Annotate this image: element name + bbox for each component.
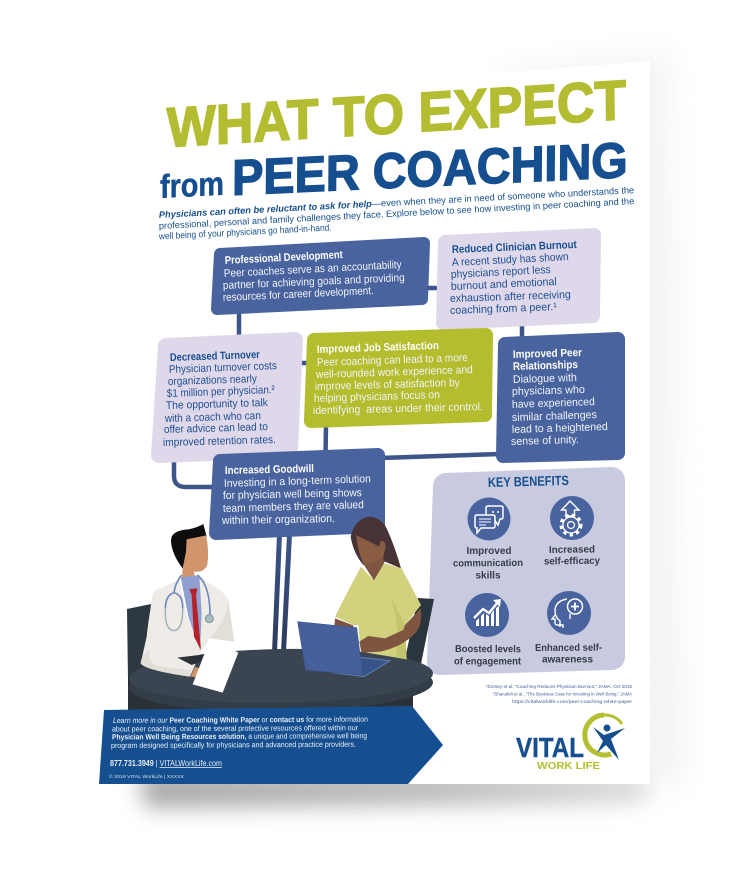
label: increased self-efficacy: [544, 544, 600, 567]
right chair: [405, 598, 434, 664]
connector posts behind table: [272, 535, 292, 652]
body text: organizations nearly: [168, 373, 257, 388]
logo tagline: WORK LIFE: [537, 760, 600, 772]
paper sheet: [99, 61, 650, 784]
body text: improved retention rates.: [163, 434, 276, 449]
face: [356, 535, 385, 565]
panel: improved job satisfaction: [311, 335, 486, 421]
heading: improved job satisfaction: Improved Job Satisfaction: [317, 340, 439, 356]
body text: coaching from a peer.¹: [450, 301, 557, 317]
shirt: [181, 575, 202, 650]
heading: key benefits: KEY BENEFITS: [488, 473, 569, 490]
body text: resources for career development.: [223, 285, 374, 304]
body text: exhaustion after receiving: [450, 289, 571, 305]
label: improved communication skills: skills: [475, 570, 501, 582]
body text: [221, 473, 371, 527]
label: boosted levels of engagement: of engagement: [454, 656, 522, 668]
body text: physicians report less: [451, 264, 551, 281]
panel: increased goodwill: [216, 455, 378, 533]
references: [486, 684, 633, 704]
heading: decreased turnover: Decreased Turnover: [170, 349, 261, 364]
icon: self-awareness head: [547, 591, 591, 635]
references: ¹Dorsey et al. "Coaching Reduces Physician Burnout," JAMA, Oct 2019: [486, 684, 632, 689]
laptop: [298, 622, 390, 677]
logo wordmark: VITAL: [516, 732, 584, 763]
icon: communication bubbles: [468, 498, 510, 540]
body text: Physician turnover costs: [169, 360, 277, 376]
hair: [171, 524, 207, 569]
intro paragraph: professional, personal and family challenges they face. Explore below to see how investing in peer coaching and the: [159, 196, 634, 231]
references: https://vitalworklife.com/peer-coaching-white-paper: [512, 699, 633, 704]
icon: engagement growth chart: [465, 593, 509, 637]
body text: partner for achieving goals and providing: [223, 272, 405, 292]
references: ²Shanafelt et al., "The Business Case for Investing in Well Being," JAMA: [493, 692, 633, 696]
paper: [193, 638, 238, 693]
panel: reduced clinician burnout: [443, 235, 594, 323]
banner text: program designed specifically for physicians and advanced practice providers.: [111, 740, 356, 750]
banner: call to action: [99, 706, 443, 784]
body text: team members they are valued: [223, 499, 364, 515]
hand: [191, 667, 214, 677]
face and neck: [182, 535, 208, 582]
scrub top: [335, 563, 421, 659]
body text: helping physicians focus on: [314, 389, 440, 405]
body text: [163, 360, 277, 449]
body text: Dialogue with: [513, 372, 577, 386]
body text: have experienced: [512, 396, 595, 411]
connector lines: [174, 288, 522, 487]
body text: similar challenges: [512, 409, 598, 424]
label: increased self-efficacy: Increased: [549, 544, 595, 556]
body text: burnout and emotional: [451, 276, 557, 293]
heading: reduced clinician burnout: Reduced Clinician Burnout: [452, 239, 577, 256]
body text: improve levels of satisfaction by: [315, 377, 460, 393]
title: PEER COACHING: [232, 132, 628, 206]
body text: offer advice can lead to: [164, 421, 268, 436]
banner text: Learn more in our Peer Coaching White Paper or contact us for more information: [113, 715, 368, 725]
banner text: about peer coaching, one of the several protective resources offered within our: [112, 723, 358, 733]
body text: physicians who: [512, 384, 585, 398]
intro paragraph: well being of your physicians go hand-in-hand.: [158, 222, 332, 242]
body text: Investing in a long-term solution: [224, 473, 371, 490]
title: WHAT TO EXPECT: [167, 68, 626, 159]
body text: sense of unity.: [511, 434, 579, 448]
label: increased self-efficacy: self-efficacy: [544, 556, 600, 567]
illustration: nurse and laptop: [298, 517, 421, 677]
table: [128, 646, 433, 715]
panel: key benefits: [440, 473, 612, 668]
panel: decreased turnover: [159, 340, 295, 455]
body text: Peer coaching can lead to a more: [317, 352, 468, 369]
heading: professional development: Professional Development: [225, 249, 343, 267]
title: [160, 68, 628, 206]
body text: The opportunity to talk: [166, 397, 269, 412]
logo: vital work life: [516, 715, 625, 772]
label: improved communication skills: Improved: [466, 546, 512, 557]
body text: [511, 372, 608, 448]
title: from: [160, 165, 224, 205]
clipboard: [177, 654, 204, 665]
label: improved communication skills: communication: [453, 558, 523, 569]
illustration: chairs and table: [127, 598, 434, 715]
label: boosted levels of engagement: Boosted levels: [455, 644, 521, 655]
far arm: [334, 618, 353, 628]
body text: $1 million per physician.²: [167, 384, 275, 400]
body text: A recent study has shown: [452, 251, 569, 269]
heading: improved peer relationships: Improved Peer: [513, 347, 583, 361]
tie: [189, 588, 201, 650]
logo ring: [585, 715, 622, 755]
contact line: 877.731.3949 | VITALWorkLife.com: [110, 759, 222, 768]
panel: professional development: [217, 243, 424, 309]
body text: with a coach who can: [164, 410, 261, 425]
body text: [313, 352, 483, 417]
heading: improved peer relationships: Relationships: [513, 359, 578, 373]
heading: improved peer relationships: [513, 347, 583, 373]
page content: [99, 61, 650, 784]
body text: identifying areas under their control.: [313, 401, 483, 417]
illustration: doctor: [141, 524, 238, 693]
body text: within their organization.: [221, 513, 335, 527]
banner text: Physician Well Being Resources solution, a unique and comprehensive well being: [112, 731, 367, 741]
body text: [450, 251, 571, 317]
lab coat: [141, 577, 234, 677]
copyright: © 2019 VITAL WorkLife | XXXXX: [109, 773, 184, 779]
label: enhanced self-awareness: [535, 643, 602, 666]
icon: self-efficacy gear and arrow: [550, 496, 594, 540]
neck: [364, 557, 384, 581]
banner text: [111, 715, 368, 750]
panel: improved peer relationships: [503, 339, 618, 456]
label: boosted levels of engagement: [454, 644, 522, 668]
heading: increased goodwill: Increased Goodwill: [225, 463, 314, 477]
label: improved communication skills: [453, 546, 523, 582]
intro paragraph: [158, 185, 634, 242]
paper shadow: [138, 52, 682, 808]
intro paragraph: Physicians can often be reluctant to ask for help—even when they are in need of someone who understands the: [159, 185, 634, 220]
body text: Peer coaches serve as an accountability: [224, 259, 402, 280]
stethoscope: [165, 575, 213, 631]
body text: well-rounded work experience and: [315, 364, 473, 381]
left chair: [127, 604, 151, 680]
label: enhanced self-awareness: Enhanced self-: [535, 643, 602, 654]
label: enhanced self-awareness: awareness: [542, 654, 593, 666]
hair: [351, 517, 401, 568]
body text: [223, 259, 405, 304]
body text: lead to a heightened: [512, 421, 608, 436]
near arm: [359, 608, 421, 653]
logo figure: [593, 724, 625, 760]
body text: for physician well being shows: [223, 487, 362, 502]
